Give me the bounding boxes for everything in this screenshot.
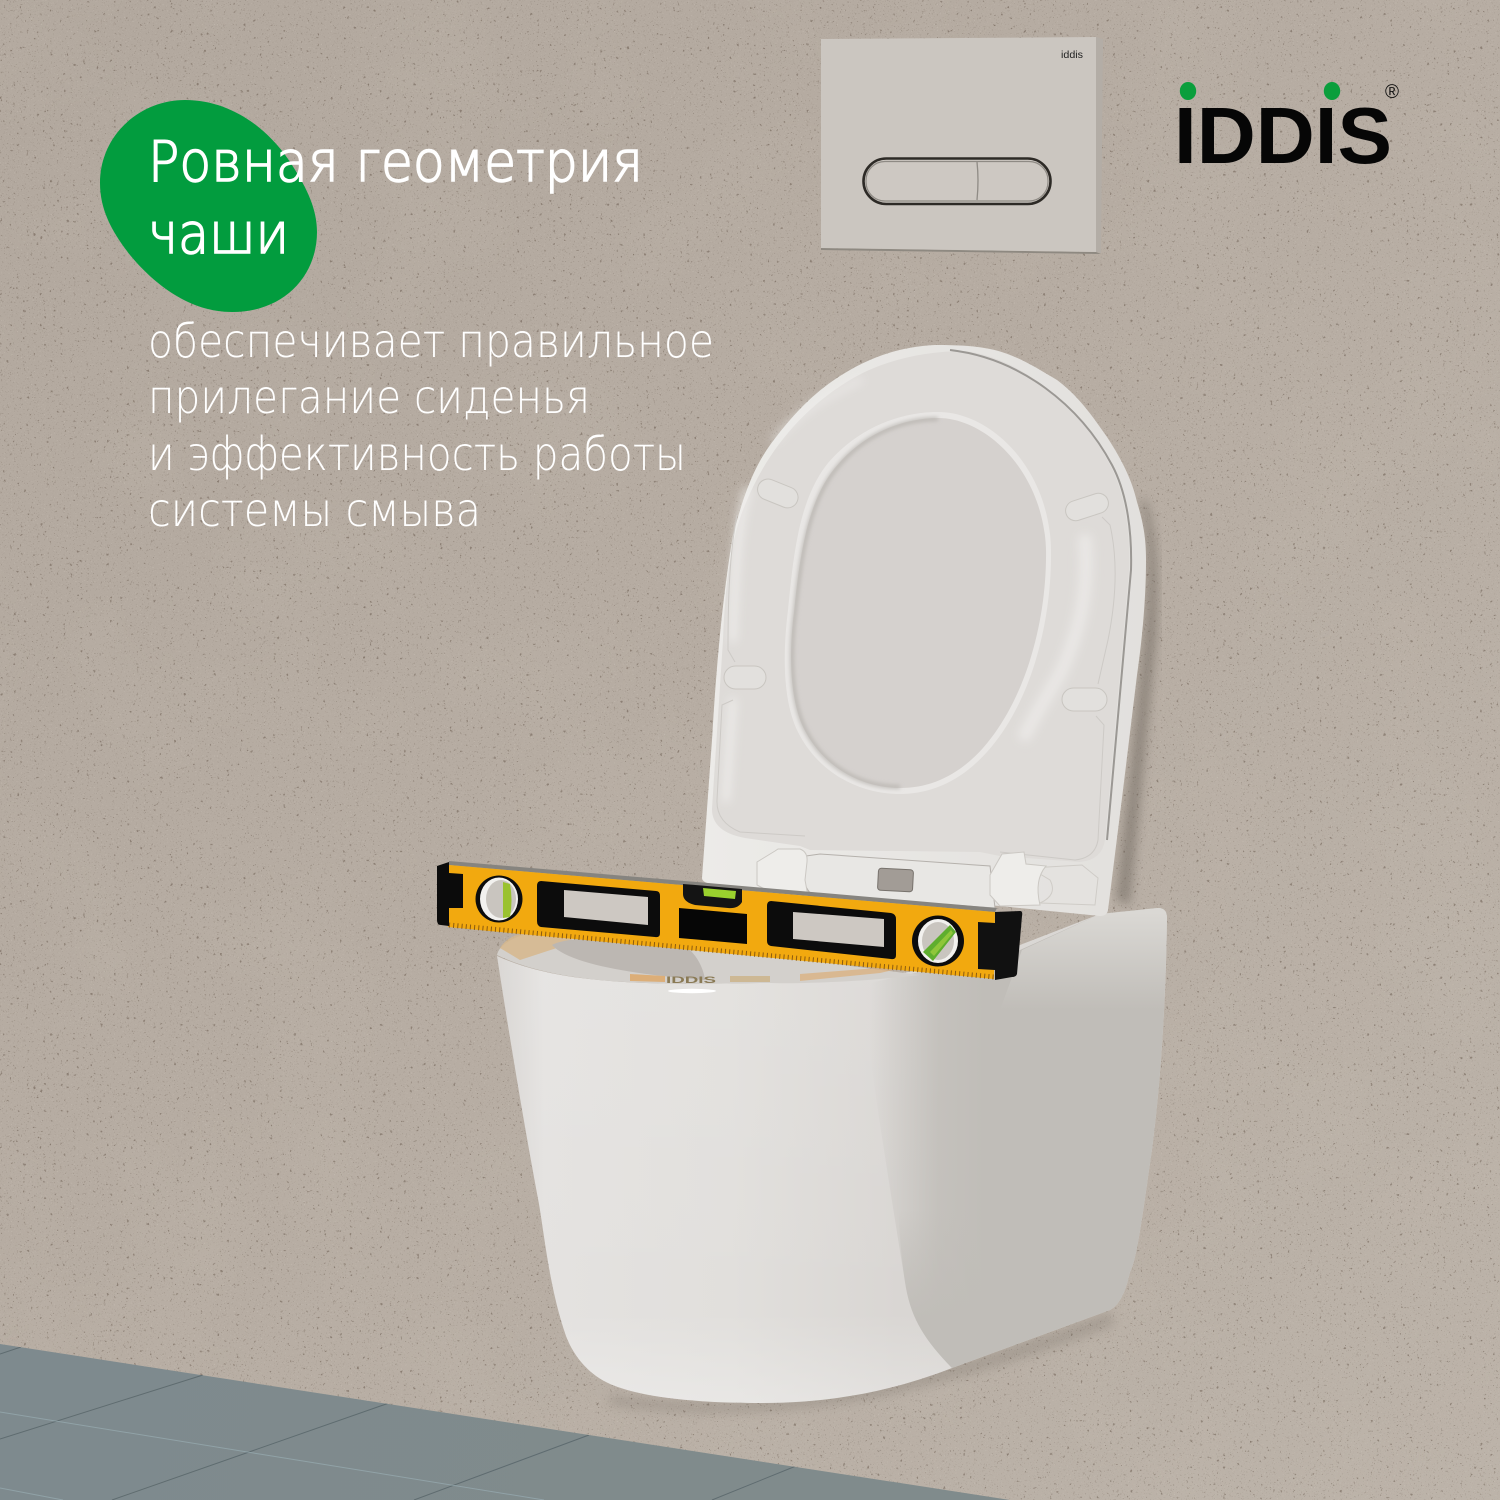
rim highlight <box>668 989 716 993</box>
flush plate <box>821 37 1103 254</box>
description text: системы смыва <box>148 483 481 537</box>
bumper top left <box>754 476 801 511</box>
center vial <box>683 884 742 908</box>
heading: Ровная геометрия <box>148 130 643 195</box>
spirit level <box>437 861 1022 980</box>
seat hinge cavity <box>1030 865 1098 905</box>
left vial <box>476 876 522 922</box>
description text: обеспечивает правильное <box>148 314 714 368</box>
right vial <box>912 916 964 966</box>
lid panel outlines <box>717 515 1115 860</box>
hinge bar <box>803 854 995 908</box>
bumper lower right <box>1062 688 1107 711</box>
description text <box>148 314 714 537</box>
left hinge <box>757 849 808 896</box>
lid gap line <box>950 350 1131 840</box>
small logo on plate: iddis <box>1061 50 1083 61</box>
toilet seat and lid <box>702 345 1146 916</box>
level yellow body <box>448 865 995 979</box>
logo dot right <box>1324 82 1340 100</box>
level ruler ticks <box>449 925 994 977</box>
right hinge <box>990 852 1046 906</box>
chrome release button <box>877 868 914 892</box>
floor tiles <box>0 1344 1010 1500</box>
bowl rear lower edge <box>898 1210 1000 1368</box>
wall shadows <box>610 500 1158 1413</box>
description text: и эффективность работы <box>148 427 686 481</box>
bowl interior reflection <box>497 928 920 985</box>
description text: прилегание сиденья <box>148 370 590 424</box>
green blob <box>100 100 317 312</box>
center black label <box>679 908 747 944</box>
bumper top right <box>1063 491 1111 523</box>
toilet bowl <box>497 908 1167 1403</box>
registered mark: ® <box>1385 82 1399 103</box>
left window <box>537 881 660 937</box>
bowl rear section <box>860 908 1167 1368</box>
bowl interior reflection: IDDIS <box>666 975 716 985</box>
heading <box>148 130 643 267</box>
right end cap <box>978 911 1022 980</box>
bumper lower left <box>724 666 766 689</box>
bowl top right lit area <box>1000 908 1167 1010</box>
lid <box>712 351 1129 862</box>
logo dot left <box>1180 82 1196 100</box>
IDDIS logo: IDDIS <box>1174 91 1392 180</box>
seat outer shape <box>702 345 1146 916</box>
level top edge <box>449 861 997 912</box>
seat opening disk <box>791 418 1046 788</box>
heading: чаши <box>148 202 289 267</box>
dual flush button <box>864 158 1050 204</box>
lid raised panels highlight <box>726 380 1086 800</box>
right window <box>767 901 896 959</box>
seat opening ring <box>785 412 1051 794</box>
left end cap <box>437 862 463 926</box>
